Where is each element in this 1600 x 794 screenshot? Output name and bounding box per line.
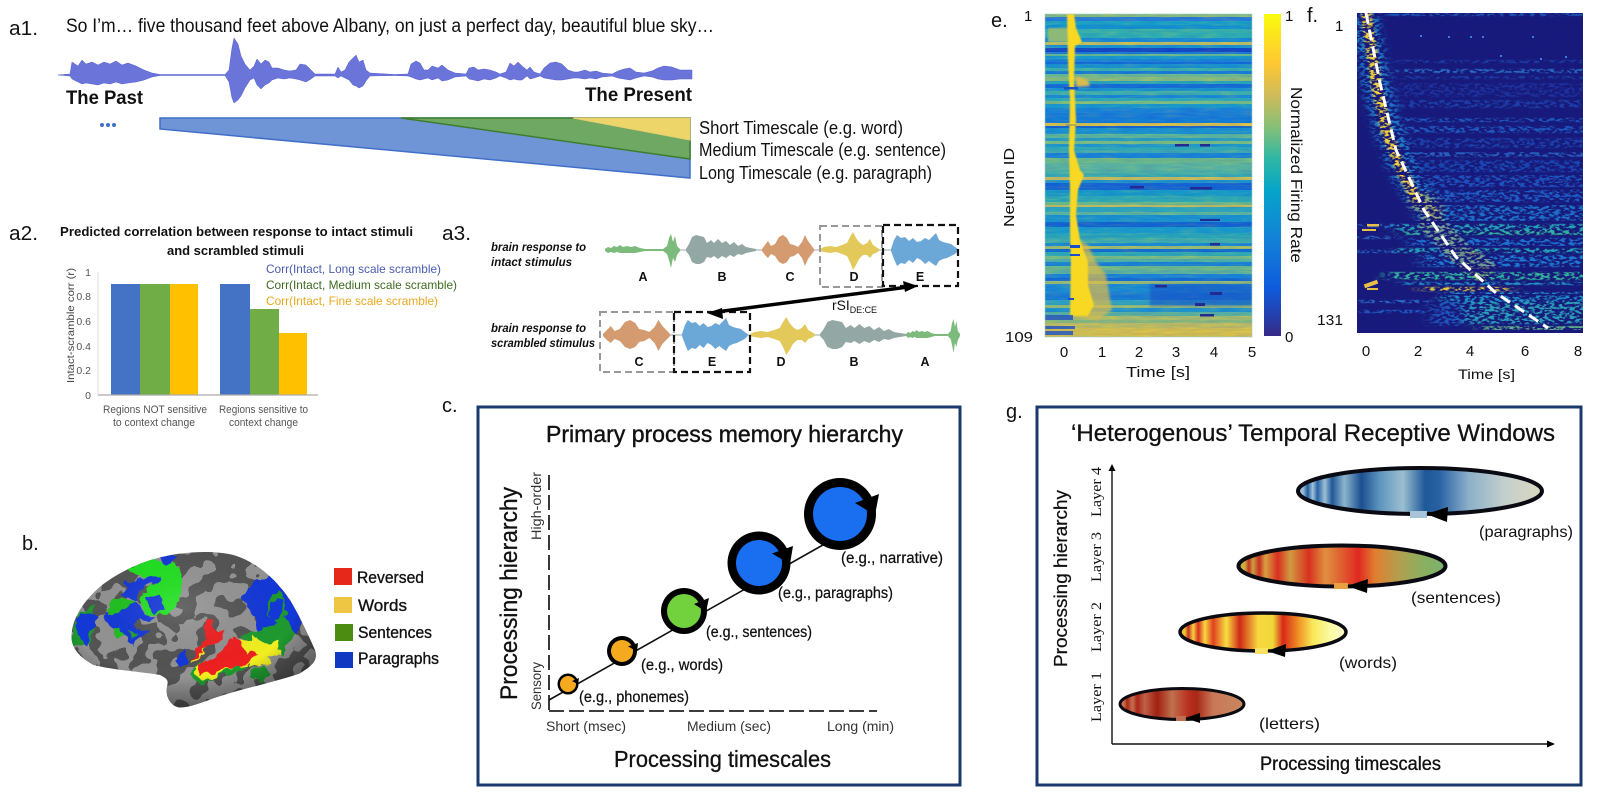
neuron id ticks: 109 — [1005, 329, 1033, 346]
chart title: Predicted correlation between response to intact stimuli — [60, 224, 413, 239]
x ticks: 2 — [1135, 344, 1143, 361]
panel label e: e. — [991, 10, 1008, 32]
panel a2: predicted correlation bar chart — [9, 223, 457, 429]
x axis title: Processing timescales — [1260, 754, 1441, 775]
legend: sentences: Sentences — [358, 624, 432, 642]
neuron id ticks — [1005, 8, 1033, 346]
early response band — [1067, 14, 1094, 316]
timescale labels: Medium Timescale (e.g. sentence) — [699, 140, 946, 160]
legend: reversed — [334, 568, 424, 587]
panel title: ‘Heterogenous’ Temporal Receptive Windows — [1071, 420, 1555, 447]
heatmap rows — [1045, 14, 1252, 337]
segment letters, scrambled — [634, 355, 930, 369]
panel g: heterogeneous temporal receptive windows — [1006, 401, 1581, 785]
panel label a2: a2. — [9, 223, 38, 245]
x axis ticks: Short (msec) — [546, 718, 626, 734]
x ticks: 3 — [1172, 344, 1180, 361]
y axis title: Processing hierarchy — [496, 487, 523, 700]
audio waveform — [58, 38, 692, 103]
window captions: (sentences) — [1411, 590, 1501, 607]
scale examples: (e.g., narrative) — [841, 550, 943, 567]
medium timescale wedge — [401, 118, 690, 159]
legend: Corr(Intact, Fine scale scramble) — [266, 294, 438, 308]
category labels: context change — [229, 417, 298, 429]
y axis ticks: 1 — [85, 267, 91, 279]
dashed box E scrambled — [674, 312, 750, 372]
yellow onset blobs — [1362, 224, 1379, 290]
axes — [1108, 464, 1555, 748]
bars: sensitive — [220, 284, 307, 395]
y axis ticks — [76, 267, 91, 402]
panel a1: speech waveform and timescales — [9, 16, 946, 183]
y axis ticks: 0 — [85, 390, 91, 402]
spoken sentence: So I’m… five thousand feet above Albany, on just a perfect day, beautiful blue sky… — [66, 16, 714, 37]
timescale labels: Short Timescale (e.g. word) — [699, 118, 903, 138]
colorbar ticks: 0 — [1285, 329, 1293, 346]
y axis title: Neuron ID — [1001, 148, 1018, 227]
timescale labels — [699, 118, 946, 183]
neuron id ticks: 1 — [1335, 18, 1343, 35]
panel label f: f. — [1307, 5, 1318, 27]
category labels: to context change — [113, 417, 195, 429]
rSI label: DE:CE — [850, 305, 877, 315]
scale examples: (e.g., sentences) — [706, 624, 812, 641]
heatmap f — [1357, 13, 1600, 333]
panel label a1: a1. — [9, 18, 38, 40]
narrative circle — [804, 478, 879, 550]
x ticks: 0 — [1060, 344, 1068, 361]
segment letters, intact: E — [916, 270, 924, 284]
scale examples: (e.g., paragraphs) — [778, 585, 893, 602]
y axis ticks: 0.8 — [76, 291, 91, 303]
panel b: brain map — [22, 533, 439, 713]
row captions: scrambled stimulus — [491, 336, 595, 350]
y axis end labels — [528, 472, 544, 710]
panel f: sequential firing heatmap — [1307, 5, 1600, 382]
dashed axes — [549, 475, 877, 711]
neuron id ticks: 131 — [1317, 312, 1343, 329]
lower right cool zone — [1150, 284, 1252, 306]
short timescale wedge — [573, 118, 690, 140]
panel frame — [478, 407, 960, 785]
y axis end labels: Sensory — [528, 662, 544, 710]
segment letters, intact — [638, 270, 924, 284]
chart title — [60, 224, 413, 258]
y axis end labels: High-order — [528, 472, 544, 540]
panel frame — [1037, 407, 1581, 785]
intact waveform — [605, 232, 958, 270]
neuron id ticks: 1 — [1024, 8, 1032, 25]
x axis title: Time [s] — [1458, 367, 1515, 382]
x ticks — [1060, 344, 1256, 361]
double arrow — [707, 281, 918, 319]
layer labels — [1089, 466, 1105, 722]
layer labels: Layer 2 — [1089, 602, 1105, 652]
row captions: brain response to — [491, 321, 586, 335]
x axis title: Processing timescales — [614, 746, 831, 772]
scale examples — [579, 550, 943, 706]
panel a3: intact versus scrambled responses — [442, 223, 960, 372]
panel label b: b. — [22, 533, 39, 555]
ellipsis dots — [100, 123, 116, 127]
panel title: Primary process memory hierarchy — [546, 421, 903, 447]
legend — [266, 262, 457, 308]
y axis ticks: 0.2 — [76, 365, 91, 377]
x axis title: Time [s] — [1126, 364, 1190, 381]
segment letters, scrambled: E — [708, 355, 716, 369]
letters window — [1120, 688, 1244, 723]
paragraphs circle — [728, 532, 793, 594]
band interruptions — [1045, 87, 1080, 335]
layer labels: Layer 4 — [1089, 466, 1105, 517]
neuron id ticks — [1317, 18, 1343, 329]
paragraphs window — [1298, 468, 1542, 522]
x axis ticks: Long (min) — [827, 718, 894, 734]
label: the past: The Past — [66, 88, 144, 109]
segment letters, intact: A — [638, 270, 648, 284]
x axis ticks — [546, 718, 894, 734]
segment letters, scrambled: D — [776, 355, 786, 369]
window captions: (paragraphs) — [1479, 524, 1573, 541]
firing rows — [1357, 13, 1600, 333]
legend: reversed: Reversed — [357, 569, 424, 587]
heatmap e — [1045, 14, 1252, 337]
phonemes circle — [558, 674, 579, 694]
words window — [1180, 613, 1346, 657]
window captions: (letters) — [1259, 716, 1320, 733]
row captions — [491, 240, 595, 350]
legend: words — [334, 597, 407, 615]
category labels — [103, 404, 308, 429]
x ticks: 4 — [1210, 344, 1218, 361]
speckle holes — [1357, 13, 1583, 333]
legend: words: Words — [358, 597, 407, 615]
colorbar ticks: 1 — [1285, 8, 1293, 25]
bars: not sensitive — [111, 284, 198, 395]
row captions: brain response to — [491, 240, 586, 254]
x ticks: 0 — [1362, 343, 1370, 360]
colorbar title: Normalized Firing Rate — [1287, 87, 1304, 263]
segment letters, scrambled: A — [920, 355, 930, 369]
firing band halo — [1364, 13, 1456, 257]
segment letters, intact: B — [717, 270, 727, 284]
dark specks — [1130, 144, 1222, 316]
scrambled waveform — [603, 317, 960, 355]
window captions — [1259, 524, 1573, 733]
segment letters, scrambled: C — [634, 355, 644, 369]
y axis title: Processing hierarchy — [1050, 489, 1071, 667]
legend: Corr(Intact, Long scale scramble) — [266, 262, 441, 276]
sentences window — [1238, 546, 1446, 593]
green patch — [1048, 28, 1068, 42]
y axis title: Intact-scramble corr (r) — [65, 268, 77, 383]
panel label g: g. — [1006, 401, 1023, 423]
legend: paragraphs: Paragraphs — [358, 650, 439, 668]
x ticks: 2 — [1414, 343, 1422, 360]
segment letters, scrambled: B — [849, 355, 859, 369]
x ticks: 5 — [1248, 344, 1256, 361]
layer labels: Layer 3 — [1089, 532, 1105, 582]
segment letters, intact: D — [849, 270, 859, 284]
colorbar ticks — [1285, 8, 1293, 346]
x ticks: 4 — [1466, 343, 1474, 360]
scale examples: (e.g., phonemes) — [579, 689, 689, 706]
firing band core — [1366, 13, 1420, 205]
long timescale wedge — [160, 118, 690, 178]
y axis ticks: 0.4 — [76, 341, 91, 353]
category labels: Regions sensitive to — [219, 404, 308, 416]
x axis ticks: Medium (sec) — [687, 718, 771, 734]
colorbar — [1264, 14, 1281, 336]
window captions: (words) — [1339, 655, 1397, 672]
timescale labels: Long Timescale (e.g. paragraph) — [699, 163, 932, 183]
x ticks: 1 — [1098, 344, 1106, 361]
segment letters, intact: C — [785, 270, 795, 284]
legend: Corr(Intact, Medium scale scramble) — [266, 278, 457, 292]
x ticks: 6 — [1521, 343, 1529, 360]
response halo — [1072, 235, 1112, 320]
rSI label: rSI — [832, 297, 850, 313]
panel label c: c. — [442, 395, 458, 417]
hierarchy line — [549, 537, 837, 700]
dark row lines — [1357, 150, 1583, 333]
category labels: Regions NOT sensitive — [103, 404, 207, 416]
layer labels: Layer 1 — [1089, 672, 1105, 722]
dashed box E — [883, 225, 958, 286]
x ticks — [1362, 343, 1582, 360]
sentences circle — [661, 588, 709, 634]
words circle — [607, 636, 638, 666]
dashed box D — [820, 226, 882, 287]
panel c: primary process memory hierarchy — [442, 395, 960, 785]
x ticks: 8 — [1574, 343, 1582, 360]
y axis ticks: 0.6 — [76, 316, 91, 328]
panel label a3: a3. — [442, 223, 471, 245]
row captions: intact stimulus — [491, 255, 572, 269]
panel e: heatmap of neurons — [991, 8, 1304, 381]
brain surface — [71, 552, 316, 708]
scale examples: (e.g., words) — [641, 657, 723, 674]
label: the present: The Present — [585, 85, 693, 106]
sparse dots — [1420, 35, 1567, 60]
dashed box C — [600, 312, 674, 372]
chart title: and scrambled stimuli — [167, 243, 304, 258]
fitted curve — [1366, 13, 1548, 328]
